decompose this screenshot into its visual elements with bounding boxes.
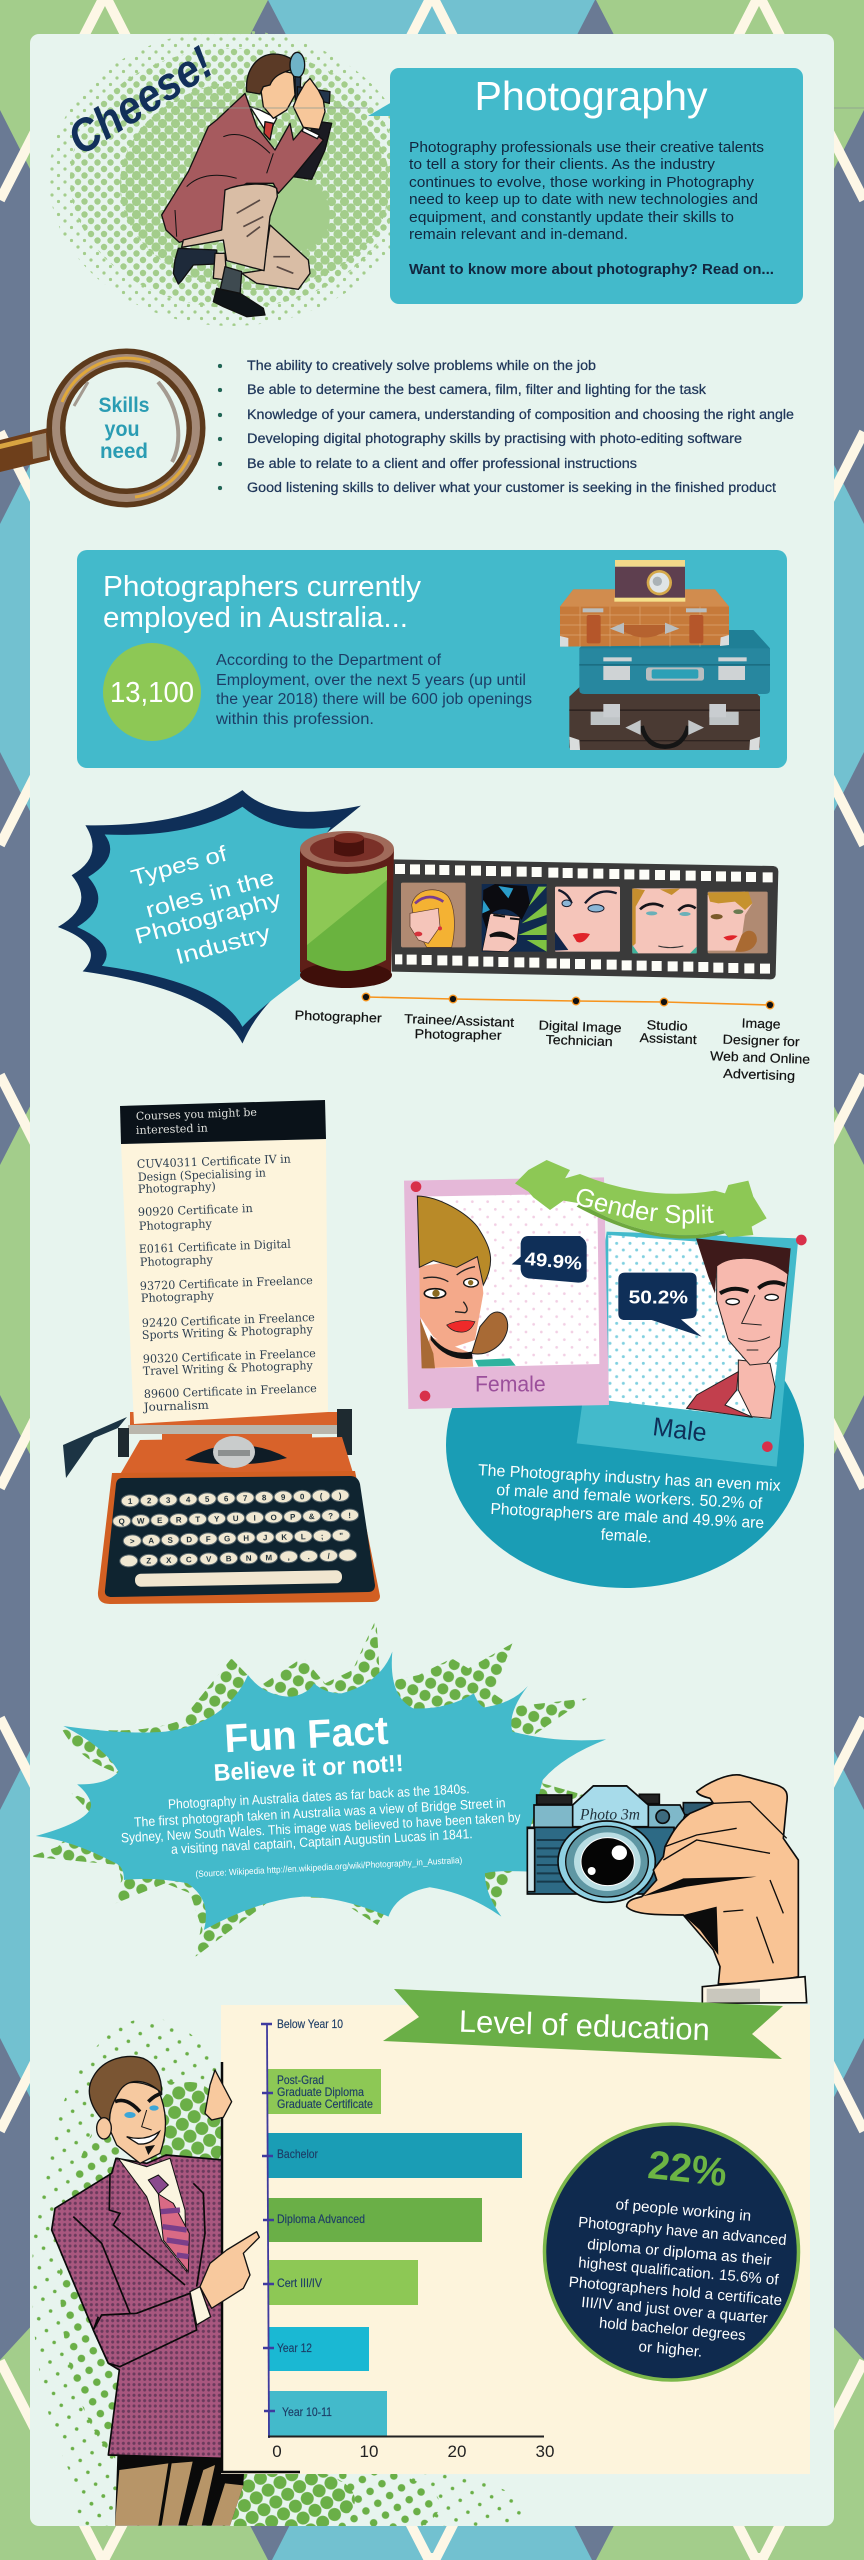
gender split text [477,1462,781,1546]
woman: left hair [420,1318,435,1368]
head [108,2082,165,2163]
heading: employed in Australia... [103,602,408,634]
callout circle: 22% [544,2124,798,2380]
woman: curl [472,1312,508,1354]
role labels [294,1007,810,1083]
skills bullet list: The ability to creatively solve problems while on the job [247,358,596,373]
category labels: Year 12 [277,2341,312,2355]
course entries: Photography [141,1288,215,1305]
illustration: man's arm and hands [93,2070,259,2367]
icon: camera held in hand [527,1775,807,2003]
heading [103,571,422,634]
lower trouser leg [242,225,310,289]
ribbon: Gender Split: Gender Split [576,1188,714,1229]
starburst text: roles in the [143,864,277,923]
label: Female: Female [475,1372,546,1397]
bars [268,2069,522,2437]
woman: neck band [431,1335,473,1359]
starburst: types of roles [58,790,361,1044]
pointing hand [200,2232,259,2308]
starburst text: Types of [128,840,230,890]
intro text: remain relevant and in-demand. [409,226,628,243]
sock [220,267,242,296]
male photo frame [577,1232,807,1467]
course entries: Journalism [143,1398,209,1414]
bar chart: level of education [261,2017,554,2461]
intro text: equipment, and constantly update their skills to [409,209,734,226]
green label [307,866,387,971]
bubble: 49.9%: 49.9% [524,1248,583,1274]
trouser flap [213,253,227,280]
woman: hair [417,1196,491,1285]
carriage knobs [118,1409,352,1457]
skills bullet list: Knowledge of your camera, understanding of composition and choosing the right angle [247,407,794,422]
man: shirt [687,1372,753,1417]
category labels: Year 10-11 [282,2405,332,2419]
hand [627,1775,798,1984]
canister knob [334,838,364,856]
role labels: Designer for [722,1032,801,1049]
face features [115,2093,162,2112]
hair [89,2057,162,2127]
keys: ZXCVBNM,./ [146,1552,331,1565]
handle [0,428,50,472]
ear [97,2118,111,2139]
tie [264,122,273,140]
upper body [118,1437,354,1478]
keyboard well [105,1476,375,1597]
role labels: Photographer [414,1026,502,1043]
pins [762,1235,807,1452]
callout text: III/IV and just over a quarter [581,2294,768,2327]
category labels: Cert III/IV [277,2276,322,2290]
illustration: man body [52,2057,245,2526]
back arm shadow [293,122,332,179]
portrait 1: blonde woman [401,883,466,947]
skills bullet list: Developing digital photography skills by practising with photo-editing software [247,431,742,446]
canister cap [300,831,394,867]
type basket [213,1436,255,1468]
role labels: Digital Image [538,1018,622,1035]
portrait 3: dark haired woman [555,887,620,952]
orange suitcase [560,589,729,647]
course entries: Photography [140,1252,214,1269]
shoe [213,288,265,317]
lens [558,1821,655,1902]
icon: typewriter [63,1409,380,1604]
keys: >ASDFGHJKL;" [130,1531,343,1546]
role labels: Image [741,1015,781,1032]
intro text: Photography professionals use their creative talents [409,139,764,156]
intro text [409,139,774,278]
course entries: Photography) [138,1179,216,1196]
starburst text [128,840,284,969]
portrait 5: woman [708,892,768,953]
line from photographer to box [190,107,368,109]
man: face [717,1258,788,1365]
label: you [104,418,140,441]
icon: film canister [300,831,394,988]
camera body stripes [537,1840,567,1882]
ribbon: Gender Split [515,1160,767,1239]
callout text: Photography have an advanced [578,2214,787,2249]
woman: neck and chest [423,1337,473,1368]
flash [290,52,305,78]
portrait 2: man with moustache [482,884,547,952]
coat [162,93,323,242]
speech tail [368,102,392,116]
fun fact text [121,1709,521,1879]
role labels: Web and Online [710,1048,810,1067]
fingers gripping sheet [205,2070,232,2120]
stat circle: 13,100 [103,643,201,741]
employment text: Employment, over the next 5 years (up until [216,672,526,689]
ribbon: level of education [383,1989,783,2059]
portrait 4: man [632,888,697,953]
chin shadow [145,2145,155,2155]
role labels: Assistant [639,1030,697,1047]
course entries: 89600 Certificate in Freelance [144,1381,317,1401]
category labels: Diploma Advanced [277,2212,365,2226]
source note: (Source: Wikipedia http://en.wikipedia.org/wiki/Photography_in_Australia) [195,1855,462,1879]
panel: photographers employed [77,550,787,768]
skills bullet list [218,358,794,495]
bubble: 50.2% [618,1273,702,1337]
category labels: Post-Grad [277,2073,324,2087]
keys: QWERTYUIOP&?! [119,1511,351,1526]
skills bullet list: Be able to relate to a client and offer professional instructions [247,456,637,471]
role labels: Technician [545,1032,613,1049]
starburst text: Industry [173,920,273,969]
man: hair [696,1238,791,1293]
trousers [115,2455,245,2526]
fact body: The first photograph taken in Australia was a view of Bridge Street in [134,1795,506,1830]
cuff [190,2287,211,2325]
role labels: Studio [646,1017,688,1034]
fact body: Photography in Australia dates as far back as the 1840s. [168,1781,470,1812]
callout text: of people working in [615,2196,752,2225]
gender split text: Photographers are male and 49.9% are [490,1501,765,1532]
camera lettering: Photo 3m [579,1806,640,1823]
ribbon: level of education: Level of education [458,2004,710,2047]
intro panel [368,68,803,304]
paper lever [63,1417,127,1478]
camera body [527,1786,712,1894]
course entries: E0161 Certificate in Digital [139,1237,291,1256]
trousers upper leg [182,184,277,271]
bubble: 50.2%: 50.2% [629,1286,688,1307]
axes [261,2024,544,2438]
subheading: Believe it or not!! [213,1750,404,1787]
heading: Photographers currently [103,571,422,603]
role labels: Advertising [723,1066,795,1083]
paper header: interested in [136,1121,208,1137]
course entries: Photography [139,1216,213,1233]
category labels: Below Year 10 [277,2017,343,2031]
x axis labels: 30 [536,2442,554,2461]
intro text: Want to know more about photography? Read on... [409,261,774,278]
course entries: Design (Specialising in [138,1166,267,1184]
type slot [185,1445,287,1465]
employment text: the year 2018) there will be 600 job openings [216,691,532,708]
jacket [52,2155,223,2458]
pins [411,1181,430,1401]
camera [297,87,330,103]
heading: Fun Fact: Fun Fact [223,1709,389,1761]
intro text: continues to evolve, those working in Photography [409,174,755,191]
course entries [137,1152,317,1414]
timeline of roles [294,993,810,1083]
employment text: within this profession. [215,711,374,728]
bubble: 49.9% [512,1236,587,1283]
female photo frame [404,1177,609,1409]
hand shadows and creases [642,1877,757,1955]
callout text: or higher. [638,2338,703,2361]
employment text: According to the Department of [216,652,442,669]
course entries: Sports Writing & Photography [142,1322,313,1342]
woman: features [424,1289,446,1298]
rear boot [173,248,217,284]
brown suitcase [569,687,760,750]
shirt [250,107,277,135]
halftone behind pointing man [32,2018,525,2558]
sheet black edges [222,2062,300,2472]
carriage [130,1412,337,1426]
intro text: need to keep up to date with new technologies and [409,191,758,208]
hair [247,54,297,94]
label [98,394,150,463]
x axis labels: 10 [360,2442,378,2461]
keys [112,1489,360,1567]
keys: 1234567890() [128,1491,342,1506]
callout text: Photographers hold a certificate [568,2274,783,2309]
fact body: a visiting naval captain, Captain Augustin Lucas in 1841. [171,1826,473,1857]
paper header [120,1100,326,1144]
gender split photo group [404,1160,807,1466]
chart sheet [221,2005,810,2474]
sprocket holes [395,864,773,974]
category labels: Graduate Diploma [277,2085,364,2099]
hands [293,78,325,129]
role labels: Trainee/Assistant [404,1011,515,1030]
woman: collar [475,1358,516,1367]
callout text: highest qualification. 15.6% of [578,2254,780,2289]
cuff [302,127,319,139]
coat creases [175,135,273,237]
stat circle: 13,100: 13,100 [110,677,194,709]
lapels [73,2173,205,2330]
fact body [121,1781,521,1857]
trouser shading [237,200,293,273]
cuff [702,1977,807,2003]
course entries: CUV40311 Certificate IV in [137,1152,292,1171]
sleeve [93,2293,197,2367]
category labels: Graduate Certificate [277,2097,373,2111]
man: neck [738,1360,775,1418]
course entries: 90920 Certificate in [138,1201,254,1219]
film strip with portraits [392,859,778,979]
label: Skills [98,394,150,417]
fact body: Sydney, New South Wales. This image was believed to have been taken by [121,1810,521,1845]
flash stem [295,77,301,100]
x axis labels [272,2442,554,2461]
skills bullet list: Be able to determine the best camera, film, filter and lighting for the task [247,382,706,397]
skills bullet list: Good listening skills to deliver what your customer is seeking in the finished product [247,480,776,495]
face [260,70,295,118]
stat: 22%: 22% [646,2143,729,2195]
course entries: Travel Writing & Photography [143,1358,313,1378]
woman: lips [447,1321,475,1332]
role labels: Photographer [294,1007,383,1026]
space bar [135,1570,342,1587]
fun fact: halftone burst backing [32,1622,587,1956]
category labels [277,2017,373,2419]
typewriter paper: courses list [120,1100,328,1424]
intro text: to tell a story for their clients. As the industry [409,156,716,173]
callout text: diploma or diploma as their [587,2236,772,2269]
label: need [100,440,148,463]
x axis labels: 20 [448,2442,466,2461]
illustration: crouching photographer [162,52,332,317]
callout text [568,2196,787,2361]
lower body [98,1471,380,1604]
icon: magnifying glass with Skills you need [0,358,196,498]
halftone behind photographer [49,30,413,326]
course entries: 93720 Certificate in Freelance [140,1273,313,1293]
paper header: Courses you might be [136,1106,257,1123]
gender split text: female. [600,1527,652,1546]
course entries: 92420 Certificate in Freelance [142,1310,315,1330]
text: Cheese!: Cheese! [58,36,222,165]
teal suitcase [579,630,770,694]
man: brows and features [720,1282,785,1293]
starburst text: Photography [132,886,284,949]
woman: face [419,1257,483,1348]
small camera [614,560,685,602]
category labels: Bachelor [277,2147,318,2161]
shirt [118,2158,187,2272]
fun fact: teal burst [36,1652,606,1930]
x axis labels: 0 [272,2442,282,2461]
gender split: teal circle [446,1302,804,1588]
gender split text: The Photography industry has an even mix [477,1462,781,1495]
tie [148,2175,189,2272]
callout text: hold bachelor degrees [598,2315,746,2344]
icon: stacked suitcases and camera [560,560,770,750]
heading: Photography: Photography [474,73,708,119]
course entries: 90320 Certificate in Freelance [143,1346,316,1366]
label: Male: Male [651,1411,708,1448]
gender split text: of male and female workers. 50.2% of [496,1482,763,1513]
employment text [215,652,532,728]
